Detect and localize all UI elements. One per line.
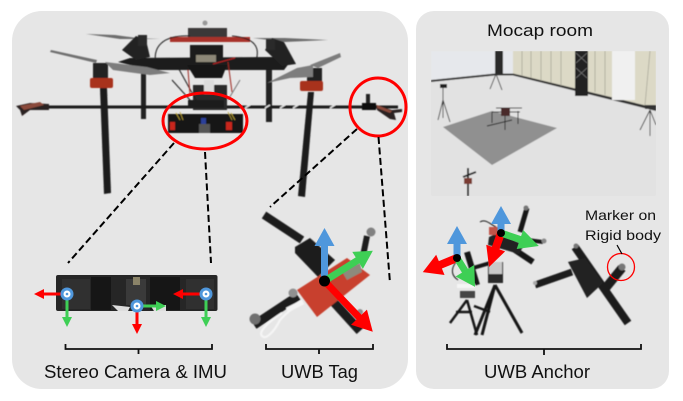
rigid body <box>533 244 628 323</box>
drone photo <box>16 20 402 197</box>
panel: drone and sensors <box>12 11 408 389</box>
panel: mocap room and anchors <box>416 11 669 389</box>
mocap room photo <box>431 51 656 196</box>
front propellers <box>50 50 341 83</box>
axis: red <box>317 273 381 339</box>
tripods <box>438 74 656 136</box>
label: Stereo Camera & IMU: Stereo Camera & IMU <box>44 362 227 382</box>
central frame <box>118 20 296 110</box>
callout circle: stereo camera <box>163 93 247 149</box>
bracket: stereo camera <box>66 344 212 354</box>
marker callout circle <box>608 254 634 280</box>
mini drone <box>487 108 522 130</box>
rear propellers <box>86 34 328 42</box>
label: UWB Anchor: UWB Anchor <box>484 362 590 382</box>
heading: Mocap room: Mocap room <box>487 21 593 40</box>
bracket: UWB anchor <box>447 344 641 355</box>
axis: up <box>314 228 334 281</box>
bracket: UWB tag <box>266 344 373 354</box>
label: UWB Tag: UWB Tag <box>281 362 358 382</box>
anchor 2 axes <box>480 206 542 270</box>
stereo camera and IMU board <box>34 275 218 334</box>
callout circle: UWB tag <box>350 78 406 136</box>
marker leader line <box>617 245 622 254</box>
stereo camera rig on drone <box>168 112 243 133</box>
dashed connectors <box>68 129 390 283</box>
UWB boom <box>16 94 402 120</box>
label: Marker on Rigid body <box>585 207 661 243</box>
motors <box>90 35 323 91</box>
anchor 1 axes <box>419 226 484 293</box>
UWB anchor on tripods <box>419 206 546 335</box>
label: Marker on Rigid body: Marker on <box>585 207 656 223</box>
UWB tag photo with axes <box>250 215 381 339</box>
rear legs <box>141 68 272 122</box>
label: Marker on Rigid body: Rigid body <box>585 227 661 243</box>
axes: IMU <box>130 300 166 334</box>
axes: left camera <box>34 288 74 327</box>
axes: right camera <box>173 288 212 327</box>
axis: green <box>319 242 378 289</box>
front legs <box>100 88 314 197</box>
